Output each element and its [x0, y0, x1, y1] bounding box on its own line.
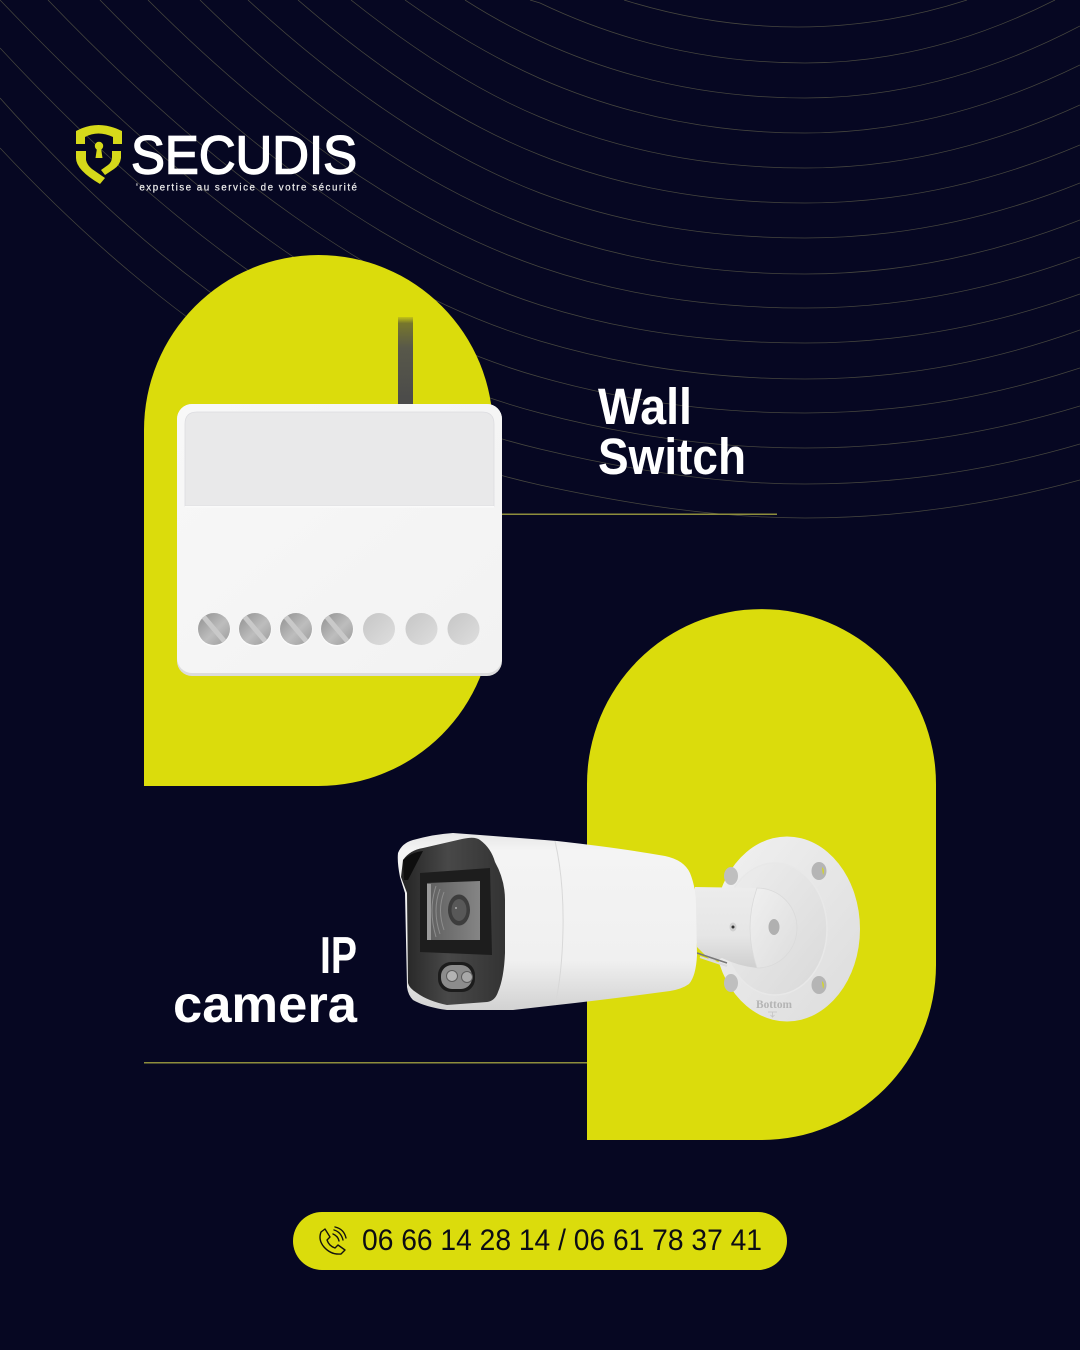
wall mount plate — [714, 836, 860, 1022]
antenna — [398, 317, 413, 406]
mount label: Bottom — [756, 997, 792, 1011]
panel: yellow arch for wall switch — [144, 255, 493, 786]
product: bullet IP camera — [398, 833, 860, 1022]
heading: Wall Switch — [598, 378, 746, 485]
phone numbers: 06 66 14 28 14 / 06 61 78 37 41 — [362, 1224, 762, 1257]
terminal screws — [198, 613, 480, 646]
lens glass — [427, 881, 480, 940]
heading: Wall Switch: Wall — [598, 378, 692, 435]
divider line: IP camera — [144, 1062, 587, 1064]
housing seam — [555, 841, 563, 1005]
heading: Wall Switch: Switch — [598, 428, 746, 485]
contact pill — [293, 1212, 787, 1270]
icon: phone — [320, 1227, 346, 1254]
device top panel — [185, 412, 494, 506]
hood shadow — [403, 851, 423, 880]
heading: IP camera: IP — [320, 927, 357, 985]
heading: IP camera: camera — [173, 976, 358, 1034]
mount arm — [692, 887, 797, 968]
panel: yellow arch for IP camera — [587, 609, 936, 1140]
lens window — [420, 868, 492, 955]
camera front face — [401, 838, 505, 1005]
icon: shield with keyhole — [76, 125, 122, 184]
logo: SECUDIS — [76, 125, 358, 194]
divider line: wall switch — [502, 514, 777, 515]
LED module — [438, 962, 475, 992]
camera housing — [398, 833, 697, 1010]
logo tagline: 'expertise au service de votre sécurité — [136, 182, 358, 194]
logo wordmark: SECUDIS — [131, 126, 357, 186]
product: wall switch — [177, 317, 502, 676]
device body — [177, 404, 502, 676]
heading: IP camera — [173, 927, 358, 1034]
